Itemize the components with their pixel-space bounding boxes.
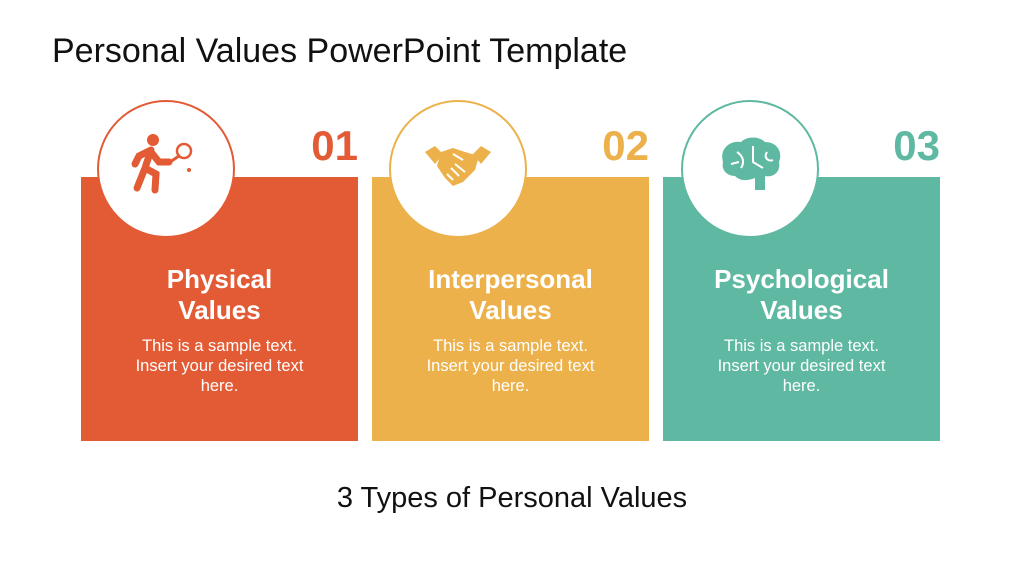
heading: interpersonal — [428, 264, 593, 325]
heading: physical: Values — [178, 295, 261, 325]
title: Personal Values PowerPoint Template — [52, 32, 627, 70]
heading: interpersonal: Values — [469, 295, 552, 325]
panel: physical — [81, 177, 358, 441]
icon circle: brain — [681, 100, 819, 238]
text: psychological: Insert your desired text — [718, 357, 885, 375]
heading: interpersonal: Interpersonal — [428, 264, 593, 294]
text: physical: here. — [201, 377, 238, 395]
number 03: 03 — [893, 122, 940, 169]
heading: psychological: Psychological — [714, 264, 889, 294]
text: interpersonal: here. — [492, 377, 529, 395]
text: physical: This is a sample text. — [142, 337, 297, 355]
text: interpersonal: This is a sample text. — [433, 337, 588, 355]
text: physical: Insert your desired text — [136, 357, 303, 375]
heading: psychological — [714, 264, 889, 325]
icon circle: tennis player — [97, 100, 235, 238]
number 01: 01 — [311, 122, 358, 169]
text: interpersonal: Insert your desired text — [427, 357, 594, 375]
heading: physical — [167, 264, 272, 325]
text: psychological: here. — [783, 377, 820, 395]
heading: physical: Physical — [167, 264, 272, 294]
text: physical — [136, 337, 304, 395]
panel: interpersonal — [372, 177, 649, 441]
number 02: 02 — [602, 122, 649, 169]
text: psychological: This is a sample text. — [724, 337, 879, 355]
caption: 3 Types of Personal Values — [337, 482, 687, 514]
icon circle: handshake — [389, 100, 527, 238]
heading: psychological: Values — [760, 295, 843, 325]
text: interpersonal — [427, 337, 594, 395]
panel: psychological — [663, 177, 940, 441]
text: psychological — [718, 337, 886, 395]
